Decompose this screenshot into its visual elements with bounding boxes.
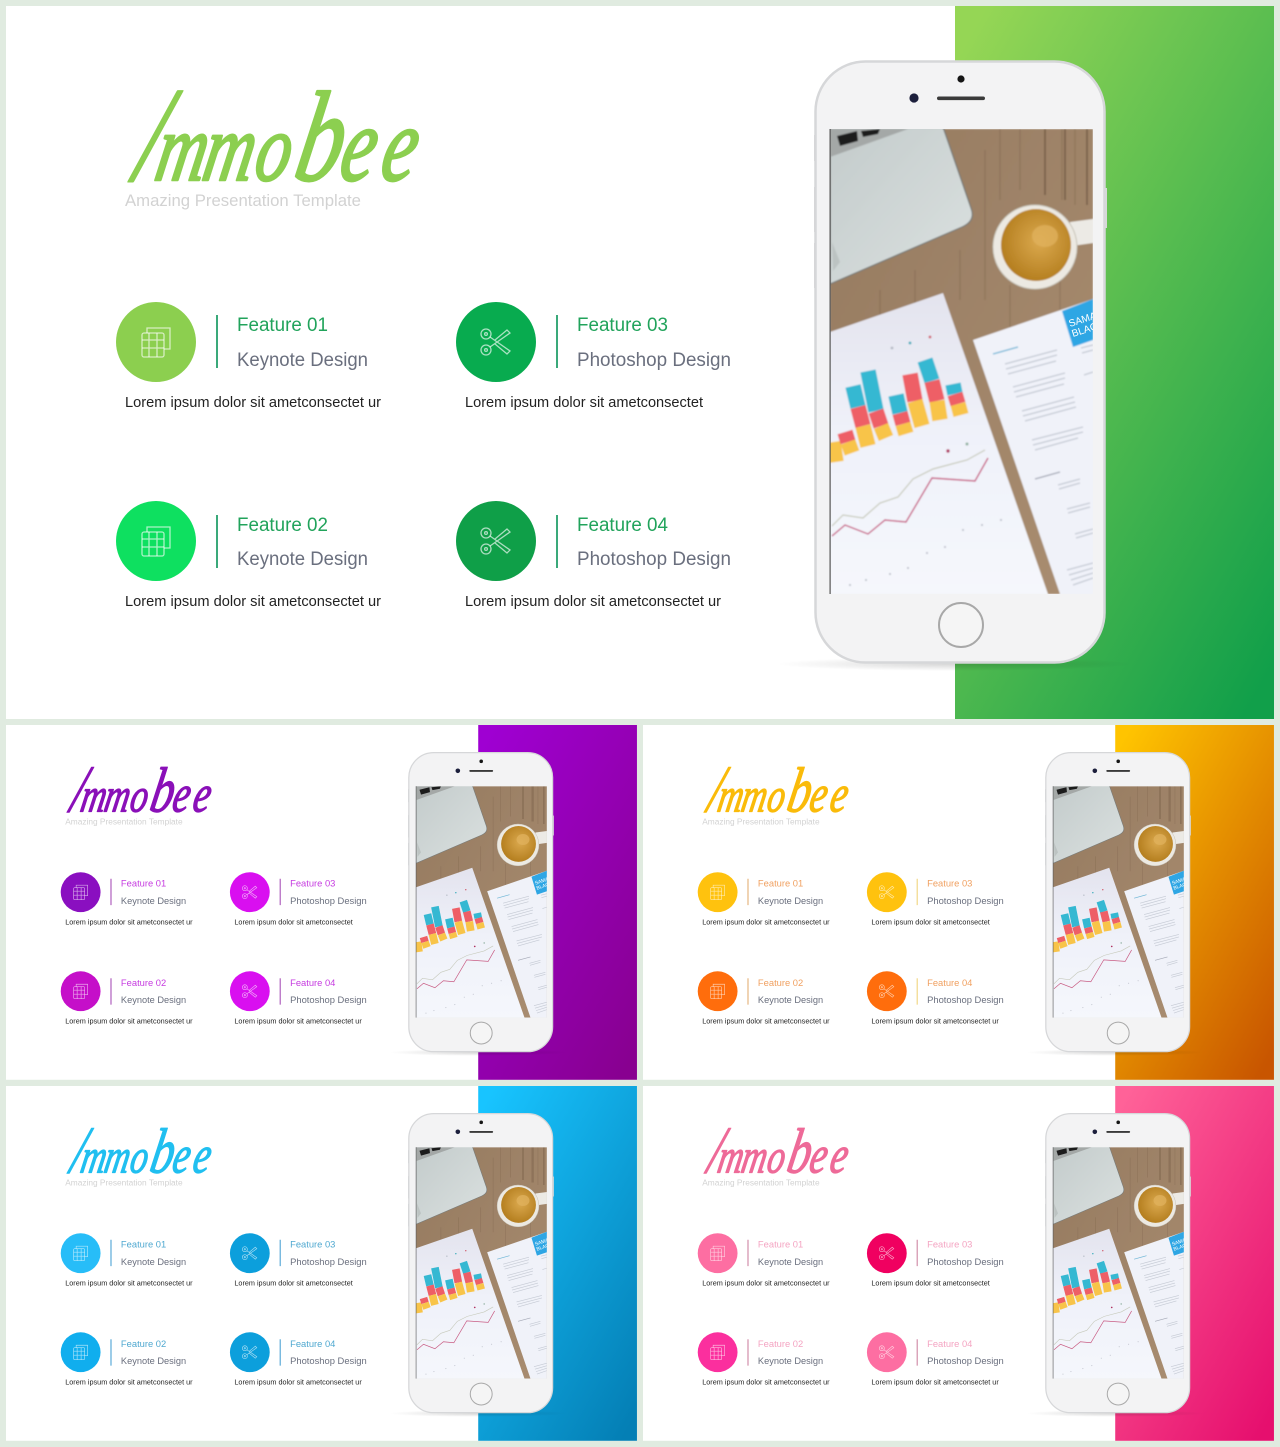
feature 01: [116, 302, 381, 411]
title: mmobee: [713, 1117, 856, 1187]
feature 01 heading: Feature 01: [758, 1240, 803, 1251]
feature 04 description: Lorem ipsum dolor sit ametconsectet ur: [871, 1017, 999, 1026]
panel: pink slide: [643, 1086, 1274, 1441]
feature 03 subheading: Photoshop Design: [290, 1257, 367, 1268]
feature 04: [456, 501, 731, 610]
title: mmobee: [76, 756, 219, 826]
feature 01 subheading: Keynote Design: [121, 896, 186, 907]
feature 03: [230, 1233, 367, 1288]
title: mmobee: [76, 1117, 219, 1187]
feature 02 description: Lorem ipsum dolor sit ametconsectet ur: [125, 594, 381, 610]
feature 03 heading: Feature 03: [577, 315, 668, 336]
feature 03 subheading: Photoshop Design: [290, 896, 367, 907]
feature 02: [116, 501, 381, 610]
icon: layers: [61, 971, 101, 1011]
feature 04 subheading: Photoshop Design: [927, 1356, 1004, 1367]
subtitle: Amazing Presentation Template: [125, 191, 361, 210]
feature 04 heading: Feature 04: [927, 978, 972, 989]
feature 02: [61, 971, 193, 1026]
feature 04: [230, 1332, 367, 1387]
feature 03 heading: Feature 03: [290, 1240, 335, 1251]
title: mmobee: [713, 756, 856, 826]
feature 04 description: Lorem ipsum dolor sit ametconsectet ur: [234, 1017, 362, 1026]
feature 04 heading: Feature 04: [577, 515, 668, 536]
feature 02 description: Lorem ipsum dolor sit ametconsectet ur: [65, 1017, 193, 1026]
panel: yellow slide: [643, 725, 1274, 1080]
feature 01 description: Lorem ipsum dolor sit ametconsectet ur: [702, 1279, 830, 1288]
feature 03: [230, 872, 367, 927]
title: I: [696, 1115, 738, 1187]
icon: layers: [61, 1332, 101, 1372]
feature 02 subheading: Keynote Design: [237, 549, 368, 570]
gradient side panel: [478, 725, 637, 1080]
feature 02 subheading: Keynote Design: [758, 995, 823, 1006]
feature 04: [867, 1332, 1004, 1387]
feature 03 description: Lorem ipsum dolor sit ametconsectet: [234, 918, 353, 927]
slide background: [6, 725, 637, 1080]
feature 04 subheading: Photoshop Design: [577, 549, 731, 570]
feature 03 heading: Feature 03: [290, 879, 335, 890]
icon: layers: [698, 872, 738, 912]
panel: purple slide: [6, 725, 637, 1080]
feature 02 description: Lorem ipsum dolor sit ametconsectet ur: [702, 1378, 830, 1387]
feature 01 heading: Feature 01: [237, 315, 328, 336]
icon: layers: [116, 501, 196, 581]
slide background: [643, 725, 1274, 1080]
panel: green main slide: [6, 6, 1274, 719]
feature 04 description: Lorem ipsum dolor sit ametconsectet ur: [465, 594, 721, 610]
title: I: [113, 64, 196, 210]
icon: scissors: [456, 302, 536, 382]
subtitle: Amazing Presentation Template: [702, 1178, 820, 1188]
feature 02 heading: Feature 02: [758, 978, 803, 989]
slide background: [6, 1086, 637, 1441]
feature 04 heading: Feature 04: [927, 1339, 972, 1350]
phone mockup: [390, 753, 567, 1056]
feature 02 heading: Feature 02: [121, 978, 166, 989]
feature 01 heading: Feature 01: [121, 879, 166, 890]
feature 01: [61, 1233, 193, 1288]
feature 02 subheading: Keynote Design: [121, 995, 186, 1006]
feature 03 subheading: Photoshop Design: [927, 896, 1004, 907]
icon: layers: [116, 302, 196, 382]
feature 01 subheading: Keynote Design: [758, 896, 823, 907]
feature 01 subheading: Keynote Design: [121, 1257, 186, 1268]
phone mockup: [1027, 753, 1204, 1056]
feature 04: [867, 971, 1004, 1026]
feature 04 description: Lorem ipsum dolor sit ametconsectet ur: [234, 1378, 362, 1387]
feature 01 description: Lorem ipsum dolor sit ametconsectet ur: [65, 918, 193, 927]
icon: scissors: [230, 971, 270, 1011]
icon: scissors: [867, 971, 907, 1011]
icon: scissors: [230, 1332, 270, 1372]
feature 01 heading: Feature 01: [121, 1240, 166, 1251]
feature 02 description: Lorem ipsum dolor sit ametconsectet ur: [65, 1378, 193, 1387]
feature 03 description: Lorem ipsum dolor sit ametconsectet: [871, 1279, 990, 1288]
feature 03 description: Lorem ipsum dolor sit ametconsectet: [871, 918, 990, 927]
feature 01 heading: Feature 01: [758, 879, 803, 890]
feature 03 heading: Feature 03: [927, 1240, 972, 1251]
phone mockup: [390, 1114, 567, 1417]
feature 04 subheading: Photoshop Design: [927, 995, 1004, 1006]
feature 02 description: Lorem ipsum dolor sit ametconsectet ur: [702, 1017, 830, 1026]
icon: scissors: [867, 872, 907, 912]
icon: scissors: [456, 501, 536, 581]
feature 04 heading: Feature 04: [290, 978, 335, 989]
feature 01: [698, 872, 830, 927]
icon: scissors: [867, 1233, 907, 1273]
feature 04 subheading: Photoshop Design: [290, 995, 367, 1006]
feature 04 subheading: Photoshop Design: [290, 1356, 367, 1367]
feature 03: [867, 1233, 1004, 1288]
icon: layers: [698, 1332, 738, 1372]
subtitle: Amazing Presentation Template: [65, 1178, 183, 1188]
feature 01: [61, 872, 193, 927]
icon: scissors: [230, 872, 270, 912]
feature 04 description: Lorem ipsum dolor sit ametconsectet ur: [871, 1378, 999, 1387]
panel: blue slide: [6, 1086, 637, 1441]
feature 02: [61, 1332, 193, 1387]
feature 02: [698, 971, 830, 1026]
feature 04 heading: Feature 04: [290, 1339, 335, 1350]
feature 03 description: Lorem ipsum dolor sit ametconsectet: [465, 395, 703, 411]
feature 02 heading: Feature 02: [758, 1339, 803, 1350]
feature 02 heading: Feature 02: [121, 1339, 166, 1350]
icon: layers: [61, 872, 101, 912]
feature 01: [698, 1233, 830, 1288]
title: mmobee: [147, 67, 434, 208]
icon: layers: [61, 1233, 101, 1273]
title: I: [59, 754, 101, 826]
feature 01 subheading: Keynote Design: [237, 350, 368, 371]
gradient side panel: [955, 6, 1274, 719]
gradient side panel: [1115, 1086, 1274, 1441]
title: I: [696, 754, 738, 826]
feature 02: [698, 1332, 830, 1387]
feature 01 subheading: Keynote Design: [758, 1257, 823, 1268]
feature 02 subheading: Keynote Design: [121, 1356, 186, 1367]
slide background: [6, 6, 1274, 719]
feature 03 heading: Feature 03: [927, 879, 972, 890]
icon: scissors: [230, 1233, 270, 1273]
feature 01 description: Lorem ipsum dolor sit ametconsectet ur: [65, 1279, 193, 1288]
phone mockup: [777, 62, 1133, 671]
subtitle: Amazing Presentation Template: [65, 817, 183, 827]
feature 03: [867, 872, 1004, 927]
gradient side panel: [478, 1086, 637, 1441]
icon: layers: [698, 971, 738, 1011]
slide background: [643, 1086, 1274, 1441]
gradient side panel: [1115, 725, 1274, 1080]
feature 03 subheading: Photoshop Design: [927, 1257, 1004, 1268]
feature 03: [456, 302, 731, 411]
title: I: [59, 1115, 101, 1187]
icon: scissors: [867, 1332, 907, 1372]
subtitle: Amazing Presentation Template: [702, 817, 820, 827]
feature 01 description: Lorem ipsum dolor sit ametconsectet ur: [702, 918, 830, 927]
feature 03 description: Lorem ipsum dolor sit ametconsectet: [234, 1279, 353, 1288]
phone mockup: [1027, 1114, 1204, 1417]
feature 03 subheading: Photoshop Design: [577, 350, 731, 371]
feature 02 subheading: Keynote Design: [758, 1356, 823, 1367]
icon: layers: [698, 1233, 738, 1273]
feature 02 heading: Feature 02: [237, 515, 328, 536]
feature 04: [230, 971, 367, 1026]
feature 01 description: Lorem ipsum dolor sit ametconsectet ur: [125, 395, 381, 411]
